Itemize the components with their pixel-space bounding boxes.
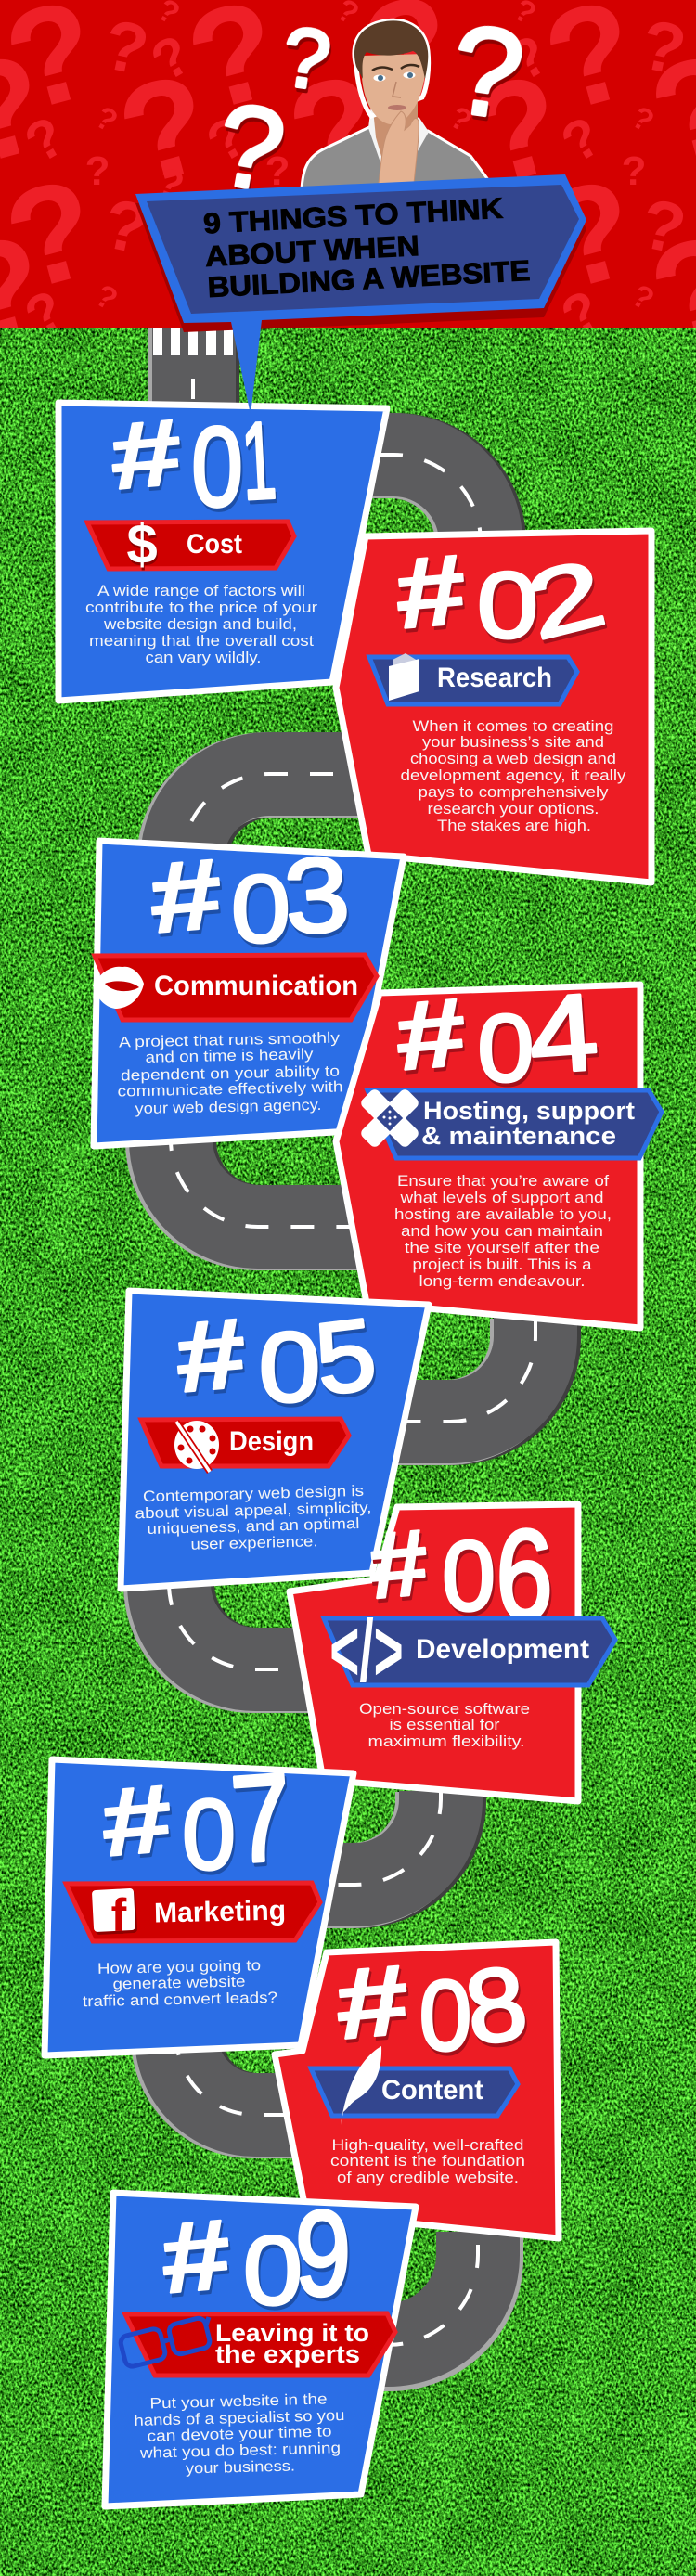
text: experts: can devote your time to (147, 2423, 332, 2445)
text: cost: A wide range of factors will (97, 583, 305, 599)
red header background with question marks: ? (89, 99, 123, 140)
number 08 (331, 1943, 534, 2072)
text: research: development agency, it really (401, 767, 626, 784)
text: development: Open-source software (359, 1701, 530, 1718)
text: hosting: what levels of support and (399, 1190, 603, 1206)
icon: facebook: f (111, 1889, 127, 1941)
text: experts (134, 2391, 345, 2478)
text: research: research your options. (427, 801, 599, 818)
text: content: of any credible website. (337, 2170, 519, 2186)
number 02: 2 (517, 539, 614, 660)
text: research: When it comes to creating (412, 718, 614, 735)
number 03: # (145, 838, 226, 954)
red header background with question marks: ? (551, 104, 612, 175)
red header background with question marks: ? (551, 277, 612, 349)
icon: white question marks (207, 0, 531, 217)
red header background with question marks (0, 0, 696, 376)
ribbon: marketing: Marketing (154, 1896, 286, 1928)
number 04: 0 (477, 995, 535, 1101)
text: research: choosing a web design and (410, 751, 616, 767)
ribbon: communication: Communication (154, 971, 358, 1001)
text: cost: can vary wildly. (145, 650, 262, 666)
text: development: maximum flexibility. (367, 1733, 525, 1750)
text: cost: meaning that the overall cost (89, 633, 314, 650)
title: BUILDING A WEBSITE (207, 254, 531, 303)
red header background with question marks: ? (141, 22, 201, 94)
text: communication: dependent on your ability to (121, 1063, 340, 1084)
ribbon: research (369, 653, 577, 704)
number 05 (171, 1296, 382, 1423)
title: ABOUT WHEN (204, 229, 420, 273)
text: hosting: and how you can maintain (401, 1223, 603, 1240)
icon: glasses (120, 2317, 212, 2368)
red header background with question marks: ? (150, 159, 190, 210)
icon: lips (93, 967, 144, 1009)
ribbon: communication (93, 955, 377, 1020)
ribbon: cost (87, 513, 294, 575)
red header background with question marks: ? (97, 5, 155, 91)
panel: 03 communication (93, 835, 404, 1146)
red header background with question marks: ? (530, 148, 652, 320)
text: hosting: hosting are available to you, (394, 1206, 612, 1223)
number 03: 3 (280, 835, 353, 957)
text: hosting: the site yourself after the (405, 1240, 599, 1256)
number 09: # (156, 2197, 235, 2314)
ribbon: experts (120, 2313, 395, 2376)
red header background with question marks: ? (104, 43, 226, 215)
text: experts: Put your website in the (149, 2391, 328, 2412)
number 05: 0 (259, 1312, 320, 1423)
icon: white question marks: ? (443, 0, 531, 146)
text: communication (117, 1029, 343, 1117)
red header background with question marks: ? (625, 277, 660, 318)
icon: feather (341, 2046, 381, 2125)
number 04: # (391, 977, 470, 1091)
text: design: Contemporary web design is (143, 1483, 364, 1505)
red header background with question marks: ? (634, 184, 692, 270)
ribbon: research: Research (437, 663, 552, 693)
text: cost (85, 583, 318, 666)
red header background with question marks: ? (85, 148, 110, 194)
ribbon: development: Development (416, 1634, 589, 1665)
number 04 (391, 972, 601, 1101)
red header background with question marks: ? (15, 277, 75, 349)
number 08: # (331, 1943, 413, 2060)
number 07: 0 (182, 1779, 236, 1890)
number 03 (145, 835, 353, 963)
red header background with question marks: ? (622, 148, 646, 194)
text: experts: hands of a specialist so you (134, 2407, 345, 2429)
text: development: is essential for (390, 1717, 500, 1733)
red header background with question marks: ? (498, 22, 559, 94)
illustration: thinking man (302, 20, 489, 190)
red header background with question marks: ? (89, 277, 123, 318)
number 09 (156, 2187, 351, 2325)
text: communication: your web design agency. (135, 1097, 322, 1117)
text: communication: A project that runs smoothly (119, 1029, 341, 1050)
icon: white question marks: ? (277, 10, 335, 109)
number 04: 4 (525, 972, 601, 1097)
number 07: 7 (227, 1747, 296, 1889)
title: 9 THINGS TO THINK (202, 192, 504, 239)
ribbon: hosting: Hosting, support (423, 1097, 635, 1125)
text: research: pays to comprehensively (418, 784, 609, 801)
text: content (330, 2137, 525, 2186)
title (202, 192, 531, 303)
number 09: 9 (295, 2187, 351, 2321)
icon: palette (174, 1421, 219, 1472)
ribbon: marketing (66, 1883, 320, 1941)
number 01: 1 (238, 400, 278, 523)
text: marketing: How are you going to (97, 1957, 261, 1977)
text: development (359, 1701, 530, 1750)
number 09: 0 (243, 2217, 303, 2325)
panel: 06 development (290, 1504, 615, 1801)
number 06: 0 (442, 1521, 496, 1631)
ribbon: hosting (359, 1088, 662, 1158)
number 06 (364, 1505, 553, 1646)
icon: dollar: $ (126, 513, 158, 575)
panel: 09 experts (105, 2187, 416, 2506)
ribbon: experts: Leaving it to (215, 2319, 369, 2347)
icon: facebook (92, 1888, 135, 1941)
text: marketing (83, 1957, 277, 2010)
red header background with question marks: ? (625, 99, 660, 140)
number 02 (391, 533, 614, 660)
ribbon: development (324, 1604, 615, 1700)
number 07: # (97, 1764, 176, 1876)
ribbon: content (311, 2046, 518, 2125)
number 03: 0 (231, 857, 290, 963)
road: winding track (153, 328, 538, 2348)
text: design: about visual appeal, simplicity, (135, 1500, 372, 1522)
number 07 (97, 1747, 296, 1890)
icon: code brackets: </> (329, 1604, 404, 1700)
text: communication: and on time is heavily (145, 1046, 315, 1066)
text: marketing: traffic and convert leads? (83, 1990, 277, 2010)
text: marketing: generate website (112, 1974, 246, 1992)
number 02: 0 (477, 553, 538, 658)
number 06: # (364, 1509, 432, 1618)
ribbon: experts: the experts (215, 2340, 360, 2368)
panel: 01 cost (58, 399, 387, 701)
icon: book (389, 653, 419, 701)
title banner with pointer (135, 174, 586, 415)
text: design: user experience. (190, 1533, 318, 1553)
ribbon: hosting: & maintenance (421, 1122, 616, 1150)
number 06: 6 (496, 1505, 553, 1646)
text: content: content is the foundation (330, 2153, 525, 2170)
text: cost: website design and build, (103, 616, 297, 633)
number 01 (106, 399, 278, 530)
red header background with question marks: ? (265, 148, 290, 194)
text: research: The stakes are high. (437, 818, 591, 834)
number 08: 8 (458, 1944, 534, 2067)
ribbon: cost: Cost (187, 529, 242, 560)
text: cost: contribute to the price of your (85, 599, 318, 616)
panel: 07 marketing (45, 1747, 354, 2055)
red header background with question marks: ? (274, 43, 396, 215)
text: research: your business’s site and (422, 734, 604, 751)
ribbon: design: Design (229, 1426, 314, 1457)
text: hosting: Ensure that you’re aware of (397, 1173, 609, 1190)
number 02: # (391, 533, 470, 650)
red header background with question marks: ? (97, 184, 155, 270)
text: design: uniqueness, and an optimal (147, 1515, 360, 1538)
text: experts: your business. (186, 2457, 295, 2478)
text: content: High-quality, well-crafted (332, 2137, 523, 2154)
panel: 08 content (275, 1942, 559, 2238)
red header background with question marks: ? (634, 5, 692, 91)
text: experts: what you do best: running (139, 2440, 341, 2462)
number 01: 0 (191, 404, 243, 530)
text: research (401, 718, 626, 834)
number 05: 5 (309, 1297, 382, 1416)
number 01: # (106, 399, 186, 509)
red header background with question marks: ? (444, 99, 478, 140)
text: communication: communicate effectively with (117, 1078, 343, 1101)
text: hosting (394, 1173, 612, 1290)
icon: white question marks: ? (207, 79, 293, 217)
panel: 02 research (336, 531, 651, 882)
text: hosting: long-term endeavour. (419, 1273, 585, 1290)
panel: 05 design (121, 1291, 429, 1589)
red header background with question marks: ? (197, 104, 257, 175)
ribbon: design (141, 1419, 349, 1472)
panel: 04 hosting (336, 972, 662, 1328)
number 08: 0 (419, 1960, 471, 2072)
ribbon: content: Content (381, 2075, 483, 2106)
text: hosting: project is built. This is a (412, 1256, 592, 1273)
icon: bandage (359, 1088, 420, 1149)
red header background with question marks: ? (457, 43, 579, 215)
number 05: # (171, 1296, 251, 1413)
text: design (135, 1483, 372, 1553)
red header background with question marks: ? (15, 104, 75, 175)
